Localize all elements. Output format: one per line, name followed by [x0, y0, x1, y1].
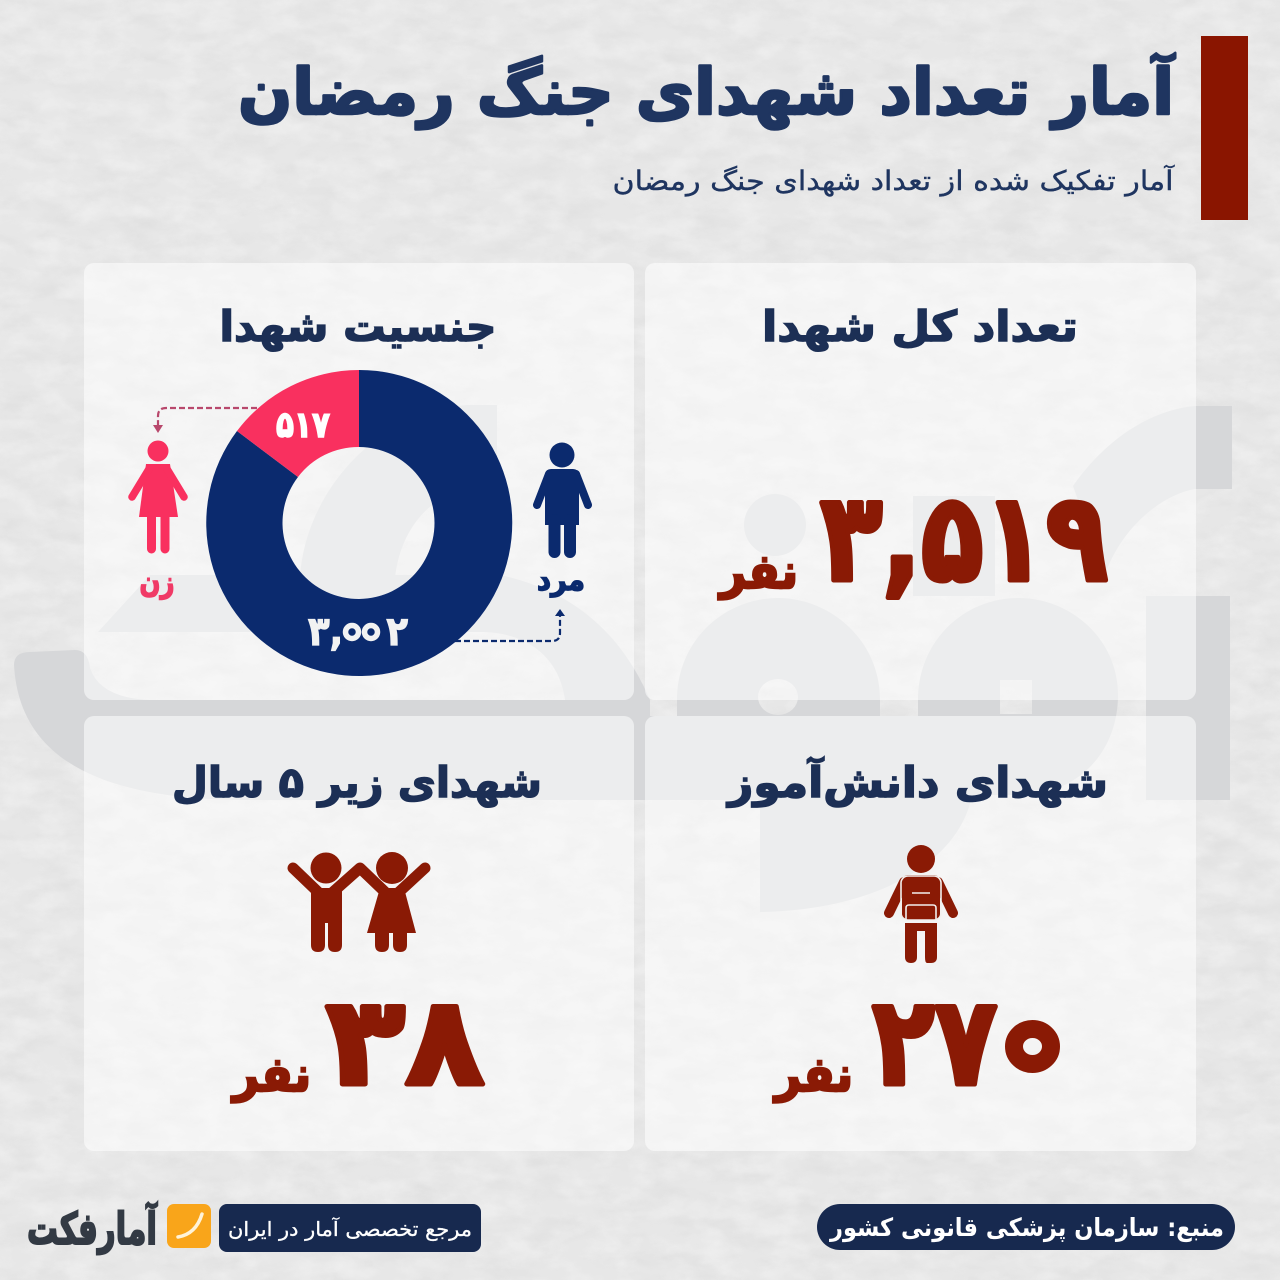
title: آمار تعداد شهدای جنگ رمضان	[238, 52, 1176, 130]
number: total martyrs: ۳,۵۱۹	[820, 467, 1108, 609]
label: woman: زن	[140, 565, 174, 600]
label: man: مرد	[537, 563, 585, 598]
panel: total martyrs	[645, 263, 1196, 700]
watermark logo	[14, 405, 1232, 912]
panel: student martyrs	[645, 716, 1196, 1151]
panel: under five	[84, 716, 634, 1151]
icon: student with backpack	[889, 845, 953, 963]
value: men: ۳,۰۰۲	[308, 609, 408, 655]
number: under five: ۳۸	[326, 971, 484, 1113]
arrow: women	[153, 408, 257, 433]
zero rings of men value	[346, 626, 378, 638]
icon: two children	[293, 852, 425, 952]
unit: under five: نفر	[231, 1047, 311, 1103]
arrow: men	[455, 609, 565, 641]
heading: gender: جنسیت شهدا	[220, 302, 496, 352]
heading: under five: شهدای زیر ۵ سال	[172, 758, 542, 808]
number: students: ۲۷۰	[872, 971, 1060, 1113]
tagline pill: مرجع تخصصی آمار در ایران	[228, 1216, 472, 1241]
source pill	[817, 1204, 1235, 1250]
unit: total martyrs: نفر	[718, 544, 798, 600]
brand wordmark: آمارفکت	[27, 1201, 158, 1255]
heading: students: شهدای دانش‌آموز	[726, 757, 1108, 808]
zero ring of students number	[1014, 1029, 1051, 1064]
icon: woman	[132, 440, 184, 549]
subtitle: آمار تفکیک شده از تعداد شهدای جنگ رمضان	[612, 165, 1175, 197]
donut chart	[206, 370, 512, 676]
tagline pill	[219, 1204, 481, 1252]
icon: orange logo mark	[167, 1204, 211, 1248]
icon: man	[537, 442, 588, 552]
unit: students: نفر	[773, 1047, 853, 1103]
panel: gender of martyrs	[84, 263, 634, 700]
heading: total martyrs: تعداد کل شهدا	[762, 302, 1078, 352]
value: women: ۵۱۷	[276, 405, 330, 446]
source pill: منبع: سازمان پزشکی قانونی کشور	[828, 1213, 1224, 1243]
header accent bar	[1201, 36, 1248, 220]
